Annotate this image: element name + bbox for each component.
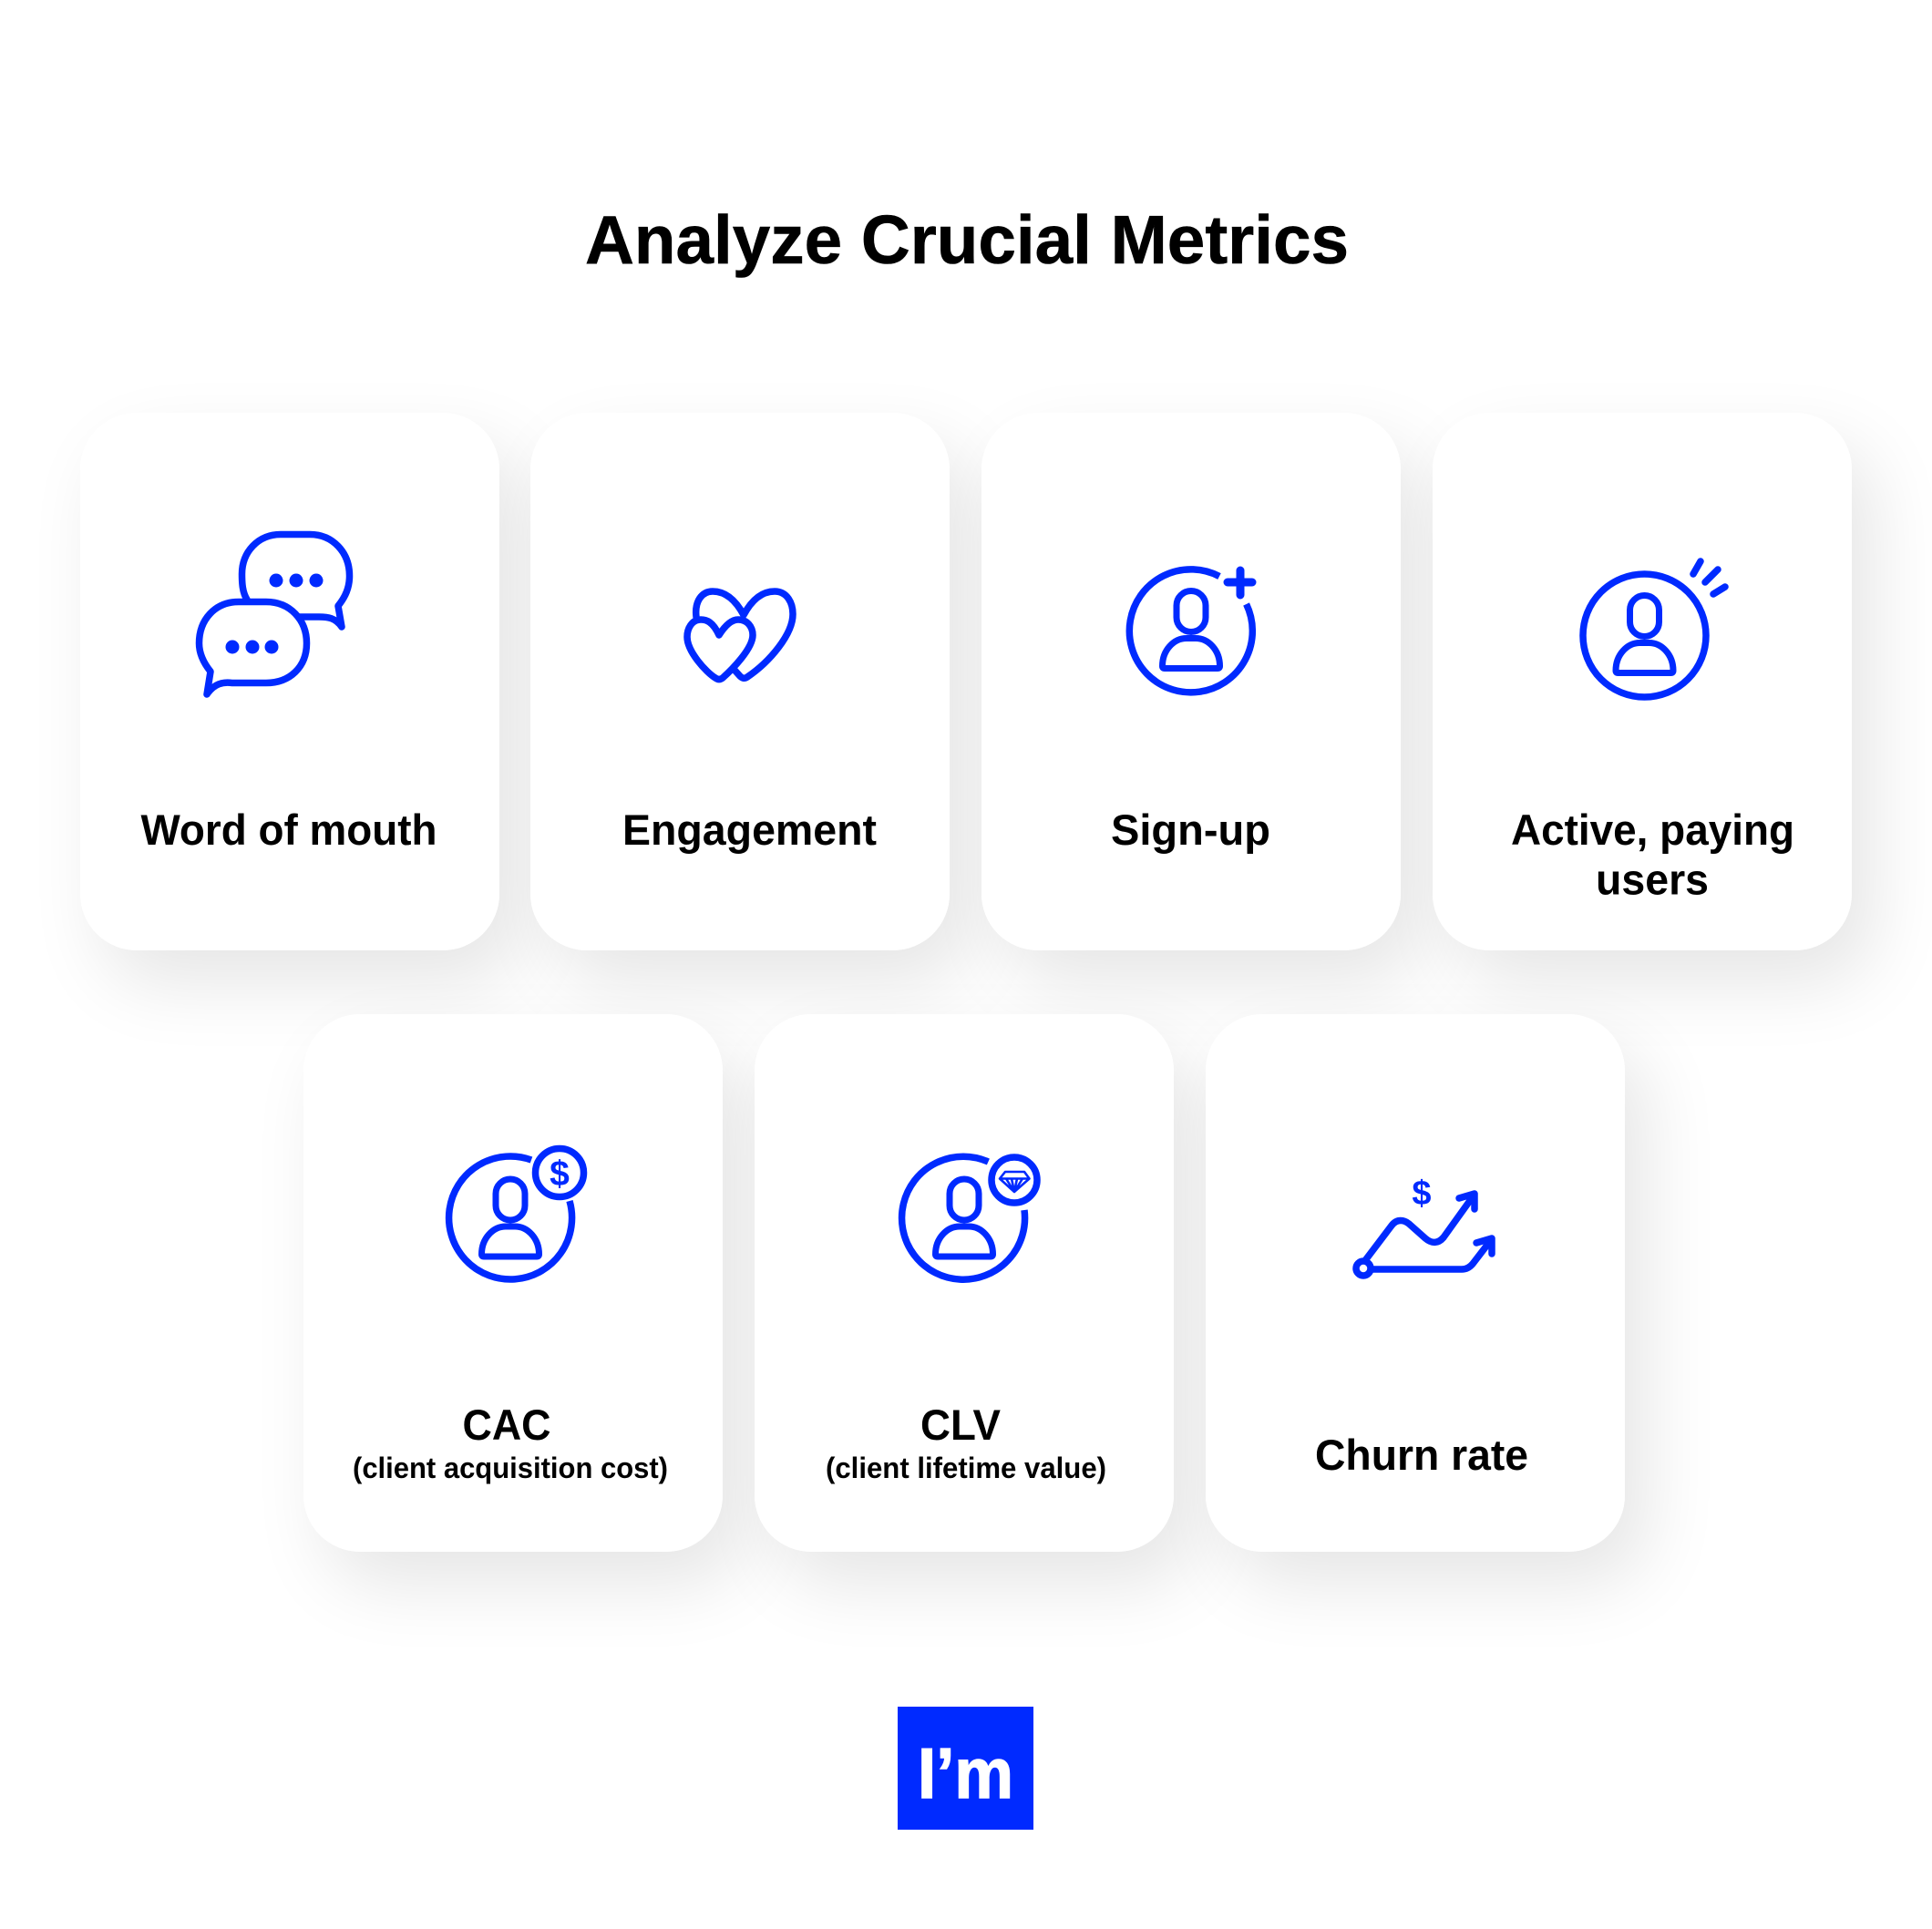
label: CLV: (client lifetime value) <box>826 1452 1106 1484</box>
panel: CAC <box>303 1014 723 1552</box>
panel: active, paying users <box>1433 413 1852 950</box>
label: engagement: Engagement <box>622 805 877 854</box>
icon: two hearts <box>683 588 796 683</box>
label: churn rate: Churn rate <box>1315 1431 1528 1479</box>
label: CAC: (client acquisition cost) <box>353 1452 668 1484</box>
panel: sign-up <box>981 413 1401 950</box>
icon: rising chart arrows <box>1352 1175 1495 1279</box>
label: CLV: CLV <box>920 1401 1002 1449</box>
panel: churn rate <box>1206 1014 1625 1552</box>
label: CAC <box>353 1401 668 1484</box>
icon: speech bubbles <box>195 530 354 698</box>
label: CLV <box>826 1401 1106 1484</box>
panel: engagement <box>530 413 950 950</box>
icon: rising chart arrows: $ <box>1412 1175 1432 1213</box>
title: Analyze Crucial Metrics <box>585 201 1349 278</box>
label: CAC: CAC <box>463 1401 550 1449</box>
icon: user with dollar coin <box>445 1144 587 1283</box>
icon: user with diamond <box>899 1154 1041 1283</box>
logo <box>898 1707 1033 1830</box>
icon: user with rays <box>1579 558 1729 701</box>
label: active, paying users <box>1511 805 1794 904</box>
icon: user with dollar coin: $ <box>550 1154 570 1194</box>
label: active, paying users: users <box>1596 855 1709 904</box>
panel: CLV <box>755 1014 1174 1552</box>
logo: I’m <box>918 1733 1013 1813</box>
panel: word of mouth <box>80 413 499 950</box>
icon: user with plus <box>1126 566 1256 696</box>
label: active, paying users: Active, paying <box>1511 805 1794 854</box>
label: sign-up: Sign-up <box>1111 805 1270 854</box>
label: word of mouth: Word of mouth <box>140 805 437 854</box>
